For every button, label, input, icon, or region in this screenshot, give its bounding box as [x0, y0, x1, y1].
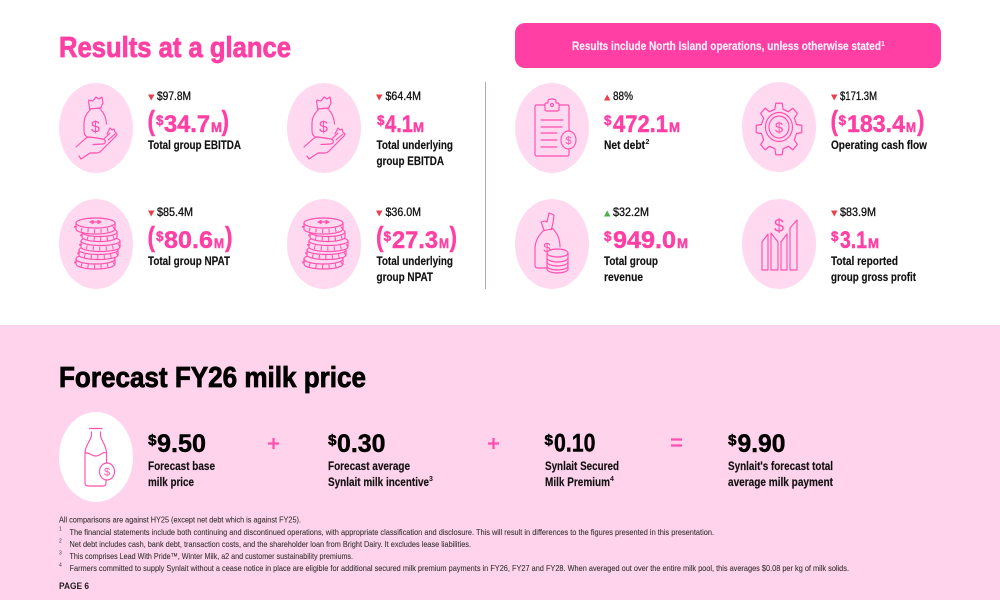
- icon: gear with dollar: $: [775, 120, 784, 136]
- banner: north island note: 1: [881, 41, 885, 48]
- item: forecast average Synlait milk incentive: [328, 430, 433, 489]
- panel: operating cash flow: [742, 82, 927, 172]
- label: total group revenue: [604, 256, 658, 284]
- icon: coin stack: [287, 199, 361, 289]
- value: $9.50: $: [148, 432, 157, 449]
- value: ($80.6M): ): [225, 221, 232, 252]
- icon: clipboard with coin: [515, 83, 589, 173]
- footnotes: 4: [59, 562, 62, 568]
- value: $472.1M: 472.1: [613, 111, 668, 138]
- panel: total group revenue: [515, 199, 688, 289]
- title: results at a glance: Results at a glance: [59, 32, 291, 64]
- value: $4.1M: M: [413, 119, 424, 135]
- banner: north island note: [515, 23, 941, 68]
- label: Synlait secured milk premium: Synlait Secured: [545, 461, 619, 473]
- change: down $171.3M: $171.3M: [840, 89, 877, 103]
- operator: plus: [268, 438, 279, 449]
- label: total reported group gross profit: Total reported: [831, 256, 898, 268]
- icon: money bag in hand: $: [91, 119, 100, 136]
- panel: total group EBITDA: [59, 83, 241, 173]
- value: $3.1M: 3.1: [840, 227, 867, 254]
- value: $4.1M: 4.1: [385, 111, 413, 138]
- value: $3.1M: M: [868, 235, 879, 251]
- icon: rising bars with dollar: $: [774, 216, 784, 236]
- value: $949.0M: M: [677, 235, 688, 251]
- icon: money bag and coins: $: [543, 240, 551, 255]
- value: $3.1M: $: [831, 228, 839, 244]
- label: operating cash flow: Operating cash flow: [831, 140, 927, 152]
- operator: plus: [488, 438, 499, 449]
- value: $9.90: 9.90: [738, 430, 786, 458]
- value: $0.10: 0.10: [554, 430, 596, 458]
- label: total underlying group NPAT: [376, 256, 453, 284]
- value: ($27.3M): (: [376, 221, 384, 252]
- icon: gear with dollar: [742, 82, 816, 172]
- value: ($34.7M): ): [222, 105, 229, 136]
- label: forecast total average milk payment: Synlait's forecast total: [728, 461, 833, 473]
- icon: money bag in hand: $: [319, 119, 328, 136]
- icon: money bag in hand: [287, 83, 361, 173]
- value: ($34.7M): M: [211, 119, 222, 135]
- value: ($27.3M): [376, 221, 457, 254]
- panel: total group NPAT: [59, 199, 232, 289]
- vertical divider: [485, 82, 486, 289]
- value: $472.1M: M: [669, 119, 680, 135]
- footnotes: 3: [59, 550, 62, 556]
- value: ($80.6M): (: [148, 221, 156, 252]
- value: $0.30: 0.30: [337, 430, 386, 458]
- label: forecast base milk price: [148, 461, 215, 489]
- label: net debt: Net debt: [604, 140, 645, 152]
- value: ($27.3M): ): [450, 221, 457, 252]
- change: up $32.2M: $32.2M: [613, 205, 649, 219]
- icon: rising bars with dollar: [742, 199, 816, 289]
- item: Synlait secured milk premium: [544, 430, 619, 489]
- label: forecast total average milk payment: [728, 461, 833, 489]
- value: ($80.6M): 80.6: [164, 227, 213, 254]
- icon: milk bottle with coin: $: [104, 466, 110, 478]
- footnotes: 2: [59, 538, 62, 544]
- panel: forecast milk price background: [0, 325, 1000, 600]
- icon: clipboard with coin: $: [565, 135, 572, 147]
- footnotes: Net debt includes cash, bank debt, transaction costs, and the shareholder loan from Bright Dairy. It excludes lease liabilities.: [70, 539, 471, 549]
- value: ($27.3M): 27.3: [392, 227, 438, 254]
- label: total underlying group NPAT: group NPAT: [376, 272, 433, 284]
- value: ($80.6M): M: [214, 235, 224, 251]
- panel: total underlying group EBITDA: [287, 83, 453, 173]
- icon: money bag in hand: [59, 83, 133, 173]
- label: forecast base milk price: milk price: [148, 477, 194, 489]
- value: ($183.4M): M: [906, 119, 916, 135]
- item: forecast total average milk payment: [728, 430, 833, 489]
- value: $949.0M: $: [604, 228, 612, 244]
- panel: total reported group gross profit: [742, 199, 916, 289]
- change: down $97.8M: [148, 89, 191, 103]
- value: $9.90: $: [728, 432, 737, 449]
- page number: PAGE 6: [59, 581, 89, 592]
- value: ($27.3M): M: [439, 235, 449, 251]
- footnotes: [59, 514, 849, 573]
- icon: milk bottle with coin: [59, 412, 133, 502]
- change: down $64.4M: $64.4M: [386, 89, 421, 103]
- value: $0.30: $: [328, 432, 337, 449]
- icon: money bag and coins: [515, 199, 589, 289]
- value: ($183.4M): $: [838, 112, 846, 128]
- value: ($80.6M): [148, 221, 232, 254]
- label: total underlying group EBITDA: Total underlying: [376, 140, 453, 152]
- icon: coin stack: [59, 199, 133, 289]
- value: ($27.3M): $: [384, 228, 391, 244]
- label: total underlying group NPAT: Total underlying: [376, 256, 453, 268]
- change: down $97.8M: $97.8M: [157, 89, 191, 103]
- label: forecast average Synlait milk incentive: Synlait milk incentive: [328, 477, 429, 489]
- footnotes: The financial statements include both continuing and discontinued operations, with appropriate classification and disclosure. This will result in differences to the figures presented in this presentation.: [70, 527, 714, 537]
- value: $9.50: 9.50: [157, 430, 206, 458]
- value: ($183.4M): 183.4: [847, 111, 905, 138]
- change: down $85.4M: $85.4M: [157, 205, 193, 219]
- label: total group revenue: Total group: [604, 256, 658, 268]
- panel: net debt: [515, 83, 680, 173]
- value: $949.0M: 949.0: [613, 227, 676, 254]
- heading: forecast FY26 milk price: Forecast FY26 milk price: [59, 362, 366, 394]
- value: $472.1M: $: [604, 112, 612, 128]
- label: Synlait secured milk premium: [545, 461, 619, 489]
- value: ($80.6M): $: [156, 228, 164, 244]
- operator: equals: [671, 440, 682, 446]
- label: net debt: 2: [646, 139, 650, 146]
- label: Synlait secured milk premium: Milk Premium: [545, 477, 610, 489]
- footnotes: Farmers committed to supply Synlait without a cease notice in place are eligible for additional secured milk premium payments in FY26, FY27 and FY28. When averaged out over the entire milk pool, this averages $0.08 per kg of milk solids.: [70, 563, 849, 573]
- value: $4.1M: $: [377, 112, 385, 128]
- value: ($34.7M): 34.7: [164, 111, 210, 138]
- footnotes: All comparisons are against HY25 (except net debt which is against FY25).: [59, 514, 301, 524]
- change: up 88%: [604, 89, 633, 103]
- value: ($34.7M): $: [156, 112, 164, 128]
- banner: north island note: Results include North Island operations, unless otherwise stated: [572, 41, 881, 53]
- change: up 88%: 88%: [613, 89, 633, 103]
- label: total underlying group EBITDA: group EBITDA: [376, 156, 444, 168]
- label: forecast average Synlait milk incentive: 3: [429, 476, 433, 483]
- change: down $36.0M: $36.0M: [386, 205, 421, 219]
- value: ($34.7M): (: [148, 105, 156, 136]
- value: $0.10: $: [544, 432, 554, 449]
- value: ($183.4M): (: [830, 105, 839, 136]
- value: ($183.4M): ): [917, 105, 924, 136]
- value: ($183.4M): [830, 105, 924, 138]
- label: total reported group gross profit: group gross profit: [831, 272, 916, 284]
- change: down $83.9M: $83.9M: [840, 205, 876, 219]
- label: total reported group gross profit: [831, 256, 916, 284]
- change: down $171.3M: [831, 89, 877, 103]
- footnotes: 1: [59, 526, 62, 532]
- label: forecast total average milk payment: average milk payment: [728, 477, 833, 489]
- footnotes: This comprises Lead With Pride™, Winter Milk, a2 and customer sustainability premiums.: [70, 551, 353, 561]
- value: ($34.7M): [148, 105, 229, 138]
- label: total group NPAT: Total group NPAT: [148, 256, 230, 268]
- item: forecast base milk price: [59, 412, 215, 502]
- panel: total underlying group NPAT: [287, 199, 457, 289]
- label: forecast base milk price: Forecast base: [148, 461, 215, 473]
- label: total underlying group EBITDA: [376, 140, 453, 168]
- label: forecast average Synlait milk incentive: Forecast average: [328, 461, 410, 473]
- label: Synlait secured milk premium: 4: [610, 476, 614, 483]
- label: forecast average Synlait milk incentive: [328, 461, 433, 489]
- label: total group revenue: revenue: [604, 272, 643, 284]
- label: total group EBITDA: Total group EBITDA: [148, 140, 241, 152]
